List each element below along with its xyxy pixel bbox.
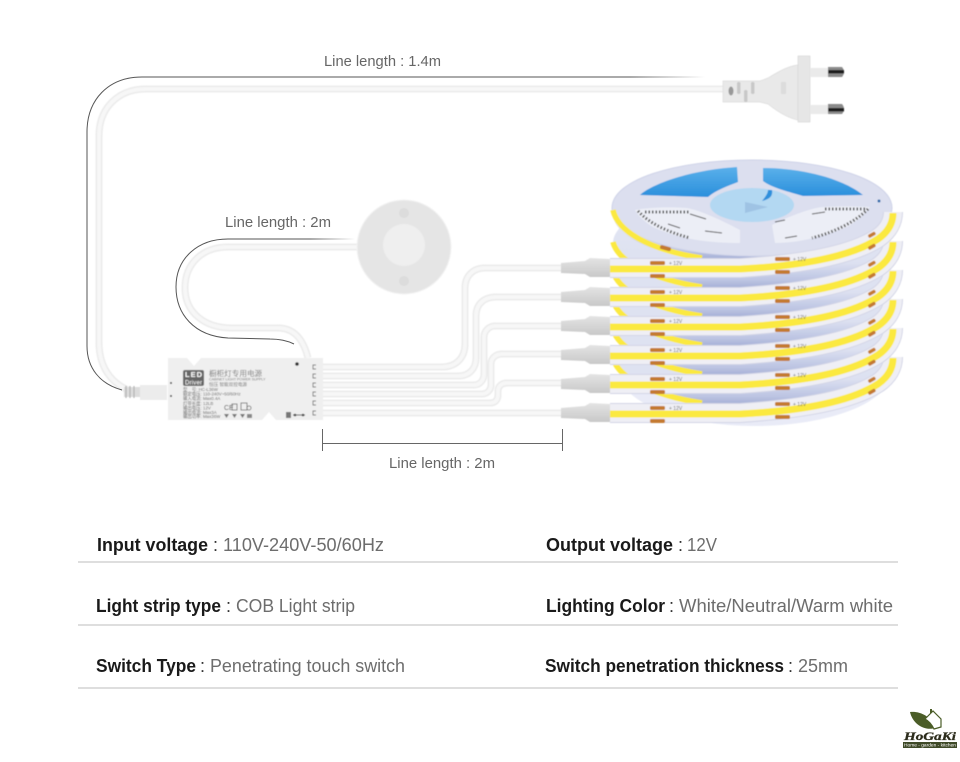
coil edge shading: [638, 211, 690, 238]
strip layer 1: + 12V: [793, 257, 807, 263]
driver label text: 输出功率: Max36W: [183, 413, 221, 420]
spec: switch penetration thickness: :: [788, 656, 793, 676]
driver label text: CABINET LIGHT POWER SUPPLY: [209, 378, 266, 382]
strip layer 3: + 12V: [793, 315, 807, 321]
logo wordmark: HoGaKi: [903, 729, 957, 743]
blue windows: [640, 167, 738, 197]
switch cable: [185, 247, 358, 358]
driver label text: 输出电压: 12V: [183, 404, 211, 411]
hub: [710, 188, 794, 222]
driver badge: Driver: [185, 380, 202, 386]
spec: lighting color: Lighting Color: [546, 596, 665, 616]
spec: switch type: Switch Type: [96, 656, 196, 676]
strip layer 2: [561, 194, 893, 307]
lower windows: [635, 207, 740, 243]
measurement line: switch cable: [176, 239, 355, 344]
driver badge: LED: [185, 370, 203, 379]
icon: touch switch: [357, 200, 451, 294]
strip layer 3: + 12V: [669, 319, 683, 325]
specification table: [78, 535, 898, 688]
spec: output voltage: Output voltage: [546, 535, 673, 555]
strip layer 5: + 12V: [669, 377, 683, 383]
dimension bracket: [322, 429, 563, 451]
strip layer 3: [561, 223, 893, 336]
strip layer 1: [561, 210, 893, 278]
strip layer 1: + 12V: [669, 261, 683, 267]
driver label text: 灯带长度: 12LB: [183, 400, 213, 407]
driver label text: 输出电流: Max3A: [183, 409, 217, 416]
strip layer 2: + 12V: [793, 286, 807, 292]
driver output ports: [313, 365, 316, 415]
reel top disc: [612, 160, 892, 256]
spec: switch type: Penetrating touch switch: [210, 656, 405, 676]
spec: input voltage: 110V-240V-50/60Hz: [223, 535, 384, 555]
driver badge: [183, 370, 204, 386]
spec: input voltage: [97, 535, 384, 555]
logo tagline: Home - garden - kitchen: [904, 742, 957, 748]
spec: lighting color: [546, 596, 893, 616]
driver label text: 橱柜灯专用电源: [209, 368, 263, 378]
spec: switch penetration thickness: 25mm: [798, 656, 848, 676]
label: switch line length: Line length : 2m: [225, 214, 331, 231]
strip layer 5: + 12V: [793, 373, 807, 379]
spec: output voltage: :: [678, 535, 683, 555]
driver certification marks: CE: [224, 405, 234, 412]
output cables to strips: [322, 268, 562, 413]
strip layer 1 body: [613, 165, 891, 263]
spec: light strip type: [96, 596, 355, 616]
icon: EU power plug: [723, 56, 844, 122]
LED driver box: [124, 358, 323, 420]
spec: switch type: [96, 656, 405, 676]
main power cable: [99, 89, 725, 390]
strip layer 2: + 12V: [669, 290, 683, 296]
strip layer 6: [561, 310, 893, 423]
spec: light strip type: COB Light strip: [236, 596, 355, 616]
driver label text: 输入电流: Max0.4A: [183, 395, 220, 402]
COB LED strip reel: [561, 160, 893, 426]
driver label text: 恒压 智能双控电源: [209, 381, 247, 388]
spec: input voltage: :: [213, 535, 218, 555]
strip layer 5: [561, 281, 893, 394]
strip layer 6: + 12V: [669, 406, 683, 412]
spec: light strip type: Light strip type: [96, 596, 221, 616]
driver certification marks: [224, 403, 305, 418]
logo: HoGaKi: [903, 709, 957, 748]
spec: output voltage: 12V: [687, 535, 717, 555]
logo leaf and house: [910, 709, 941, 729]
label: output line length: Line length : 2m: [389, 455, 495, 472]
spec: light strip type: :: [226, 596, 231, 616]
reel shadow: [619, 318, 891, 426]
spec: lighting color: White/Neutral/Warm white: [679, 596, 893, 616]
spec: switch penetration thickness: Switch penetration thickness: [545, 656, 784, 676]
row dividers: [78, 562, 898, 688]
driver label text: 额定电压: 110-240V~50/60Hz: [183, 391, 241, 398]
strip layer 4: + 12V: [793, 344, 807, 350]
driver label text: [183, 368, 266, 420]
strip layer 4: + 12V: [669, 348, 683, 354]
spec: lighting color: :: [669, 596, 674, 616]
strip layer 6: + 12V: [793, 402, 807, 408]
driver label text: 型 号: HC-L36W: [183, 386, 219, 393]
strip layer 4: [561, 252, 893, 365]
spec: input voltage: Input voltage: [97, 535, 208, 555]
measurement line: power cable: [87, 77, 705, 390]
driver input connector: [124, 385, 167, 400]
spec: switch type: :: [200, 656, 205, 676]
label: power line length: Line length : 1.4m: [324, 53, 441, 70]
